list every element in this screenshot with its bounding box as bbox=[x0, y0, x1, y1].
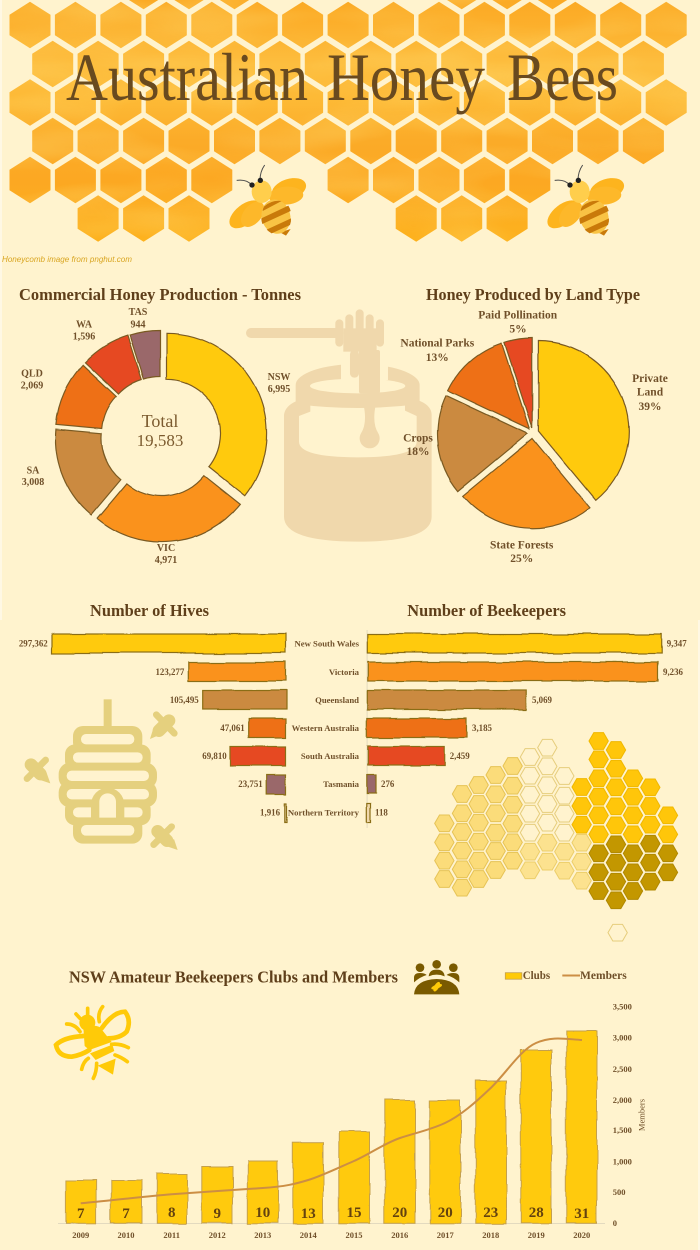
club count labels: 23 bbox=[483, 1205, 498, 1221]
slice: NSW bbox=[166, 333, 267, 496]
heading: Honey Produced by Land Type bbox=[426, 285, 640, 304]
club count labels: 9 bbox=[214, 1206, 221, 1222]
year axis labels bbox=[72, 1230, 590, 1240]
pie labels bbox=[400, 309, 668, 565]
state category labels: Tasmania bbox=[323, 779, 360, 789]
icon: group of beekeepers bbox=[414, 960, 459, 994]
members axis labels: 3,000 bbox=[613, 1032, 632, 1042]
year axis labels: 2016 bbox=[391, 1230, 408, 1240]
members axis labels: 3,500 bbox=[613, 1002, 632, 1012]
panel: clubs and members combo chart bbox=[58, 1002, 646, 1240]
beekeeper values: 118 bbox=[375, 808, 388, 818]
hive values: 297,362 bbox=[19, 638, 48, 648]
year axis labels: 2019 bbox=[528, 1230, 545, 1240]
bar: Queensland beekeepers bbox=[367, 690, 527, 710]
club count labels: 15 bbox=[346, 1205, 362, 1221]
bar: New South Wales hives bbox=[52, 634, 286, 653]
members axis labels bbox=[613, 1002, 632, 1228]
beekeeper values: 2,459 bbox=[450, 751, 470, 761]
state category labels: Northern Territory bbox=[288, 808, 360, 818]
club count labels: 20 bbox=[438, 1205, 453, 1221]
state category labels: South Australia bbox=[301, 751, 360, 761]
legend: Members bbox=[580, 970, 627, 982]
heading: Commercial Honey Production - Tonnes bbox=[19, 285, 301, 304]
bar: 2009 clubs bbox=[65, 1180, 96, 1223]
club count labels: 7 bbox=[77, 1206, 85, 1222]
slice: SA bbox=[55, 429, 121, 515]
state category labels bbox=[288, 638, 360, 818]
bar: 2010 clubs bbox=[111, 1180, 142, 1223]
heading: NSW clubs and members: NSW Amateur Beekeepers Clubs and Members bbox=[69, 968, 398, 987]
bar: 2014 clubs bbox=[293, 1143, 324, 1223]
legend bbox=[505, 970, 627, 982]
club count labels: 28 bbox=[529, 1205, 544, 1221]
donut labels bbox=[21, 307, 290, 566]
pie labels: 18% bbox=[406, 446, 430, 458]
members axis labels: 500 bbox=[613, 1187, 625, 1197]
members axis labels: 1,000 bbox=[613, 1156, 632, 1166]
bar: 2012 clubs bbox=[202, 1167, 232, 1223]
heading: Number of Hives bbox=[90, 601, 209, 620]
beekeeper values: 9,347 bbox=[667, 638, 687, 648]
year axis labels: 2017 bbox=[437, 1230, 455, 1240]
club count labels: 8 bbox=[168, 1205, 175, 1221]
year axis labels: 2010 bbox=[118, 1230, 134, 1240]
members axis title: Members bbox=[636, 1099, 646, 1131]
honeycomb header image bbox=[0, 0, 700, 250]
donut labels: 6,995 bbox=[268, 384, 290, 395]
club count labels: 20 bbox=[392, 1205, 407, 1221]
donut labels: 944 bbox=[130, 320, 146, 331]
bar: 2018 clubs bbox=[475, 1081, 506, 1223]
hexagon map of Australia bbox=[435, 733, 678, 941]
map: Queensland bbox=[572, 733, 678, 843]
slice: national parks bbox=[448, 343, 529, 429]
pie labels: National Parks bbox=[400, 338, 475, 350]
beekeeper values bbox=[375, 638, 687, 818]
pie labels: Crops bbox=[403, 432, 433, 444]
pie labels: 5% bbox=[509, 324, 527, 336]
hive values bbox=[19, 638, 281, 818]
map: Western Australia bbox=[435, 758, 522, 896]
pie labels: 25% bbox=[510, 553, 533, 565]
club count labels: 13 bbox=[301, 1206, 316, 1222]
pie labels: State Forests bbox=[490, 539, 554, 551]
year axis labels: 2018 bbox=[482, 1230, 499, 1240]
hive values: 1,916 bbox=[260, 808, 281, 818]
pie labels: Land bbox=[637, 387, 664, 399]
bar: 2016 clubs bbox=[384, 1100, 415, 1223]
map: South Australia bbox=[520, 834, 591, 889]
icon: bee right bbox=[542, 165, 627, 237]
donut centre total bbox=[137, 411, 183, 450]
club count labels: 10 bbox=[255, 1205, 270, 1221]
members axis labels: 1,500 bbox=[613, 1125, 632, 1135]
panel: number of beekeepers bar chart bbox=[367, 601, 687, 828]
state category labels: Victoria bbox=[329, 667, 360, 677]
donut labels: 2,069 bbox=[21, 380, 43, 391]
members axis labels: 2,500 bbox=[613, 1064, 632, 1074]
icon: beehive with bees bbox=[27, 699, 178, 850]
hive values: 47,061 bbox=[220, 723, 245, 733]
club count labels: 7 bbox=[122, 1206, 130, 1222]
state category labels: New South Wales bbox=[294, 638, 360, 648]
panel: commercial honey production donut bbox=[19, 285, 301, 566]
title: Australian bbox=[66, 39, 308, 115]
members axis labels: 2,000 bbox=[613, 1095, 632, 1105]
bar: 2020 clubs bbox=[566, 1031, 597, 1223]
club count labels: 31 bbox=[574, 1206, 589, 1222]
donut centre total: 19,583 bbox=[137, 431, 183, 450]
members line bbox=[81, 1038, 582, 1203]
year axis labels: 2013 bbox=[254, 1230, 271, 1240]
slice: TAS bbox=[130, 330, 160, 379]
bar: Tasmania beekeepers bbox=[367, 774, 376, 794]
state category labels: Western Australia bbox=[292, 723, 360, 733]
panel: number of hives bar chart bbox=[19, 601, 286, 822]
slice: WA bbox=[85, 336, 142, 394]
beekeeper values: 276 bbox=[381, 779, 395, 789]
bar: South Australia hives bbox=[231, 746, 286, 766]
club count labels bbox=[77, 1205, 589, 1222]
bar: New South Wales beekeepers bbox=[367, 634, 662, 653]
pie labels: 13% bbox=[426, 352, 449, 364]
pie labels: 39% bbox=[638, 401, 662, 413]
bar: 2013 clubs bbox=[247, 1161, 278, 1223]
donut labels: 1,596 bbox=[73, 331, 95, 342]
icon: honey jar and dipper bbox=[251, 309, 432, 542]
members axis labels: 0 bbox=[613, 1218, 617, 1228]
bar: 2019 clubs bbox=[521, 1050, 552, 1223]
title bbox=[66, 39, 618, 115]
map: Northern Territory and Tasmania bbox=[520, 739, 627, 941]
image credit: Honeycomb image from pnghut.com bbox=[2, 255, 132, 264]
state category labels: Queensland bbox=[315, 695, 359, 705]
year axis labels: 2011 bbox=[163, 1230, 180, 1240]
icon: yellow bee bbox=[56, 1007, 129, 1078]
hive values: 23,751 bbox=[238, 779, 263, 789]
title: Honey bbox=[327, 39, 485, 115]
bar: Victoria beekeepers bbox=[367, 662, 658, 681]
slice: private land bbox=[538, 341, 629, 500]
pie labels: Paid Pollination bbox=[478, 309, 558, 321]
donut labels: QLD bbox=[21, 369, 43, 380]
bar: Northern Territory hives bbox=[284, 803, 286, 822]
donut labels: 3,008 bbox=[22, 477, 44, 488]
slice: QLD bbox=[56, 365, 116, 428]
bar: Victoria hives bbox=[188, 662, 286, 681]
donut labels: TAS bbox=[129, 307, 148, 318]
year axis labels: 2014 bbox=[300, 1230, 318, 1240]
heading: Number of Beekeepers bbox=[407, 601, 566, 620]
map: New South Wales and Victoria bbox=[589, 835, 678, 909]
bar: 2017 clubs bbox=[430, 1100, 460, 1223]
beekeeper values: 5,069 bbox=[532, 695, 553, 705]
slice: VIC bbox=[97, 476, 240, 542]
hive values: 69,810 bbox=[202, 751, 227, 761]
year axis labels: 2009 bbox=[72, 1230, 89, 1240]
bar: 2015 clubs bbox=[339, 1131, 370, 1223]
hive values: 105,495 bbox=[170, 695, 199, 705]
year axis labels: 2020 bbox=[573, 1230, 590, 1240]
bar: South Australia beekeepers bbox=[367, 746, 445, 766]
slice: crops bbox=[438, 395, 528, 491]
donut labels: SA bbox=[27, 465, 40, 476]
legend: Clubs bbox=[523, 970, 551, 982]
donut labels: WA bbox=[76, 320, 93, 331]
bar: Northern Territory beekeepers bbox=[367, 803, 371, 822]
title: Bees bbox=[507, 39, 618, 115]
slice: paid pollination bbox=[504, 338, 532, 428]
bar: Western Australia hives bbox=[249, 718, 286, 738]
donut centre total: Total bbox=[142, 411, 178, 431]
donut labels: NSW bbox=[268, 372, 290, 383]
pie labels: Private bbox=[632, 373, 668, 385]
beekeeper values: 9,236 bbox=[663, 667, 684, 677]
year axis labels: 2012 bbox=[209, 1230, 226, 1240]
bar: Queensland hives bbox=[203, 690, 286, 710]
bar: Tasmania hives bbox=[267, 774, 286, 794]
slice: state forests bbox=[463, 438, 590, 528]
bar: 2011 clubs bbox=[156, 1174, 187, 1223]
year axis labels: 2015 bbox=[346, 1230, 362, 1240]
panel: honey produced by land type pie bbox=[400, 285, 668, 565]
beekeeper values: 3,185 bbox=[472, 723, 493, 733]
hive values: 123,277 bbox=[155, 667, 185, 677]
donut labels: VIC bbox=[157, 543, 175, 554]
bar: Western Australia beekeepers bbox=[367, 718, 467, 738]
donut labels: 4,971 bbox=[155, 555, 177, 566]
icon: bee left bbox=[224, 165, 309, 237]
